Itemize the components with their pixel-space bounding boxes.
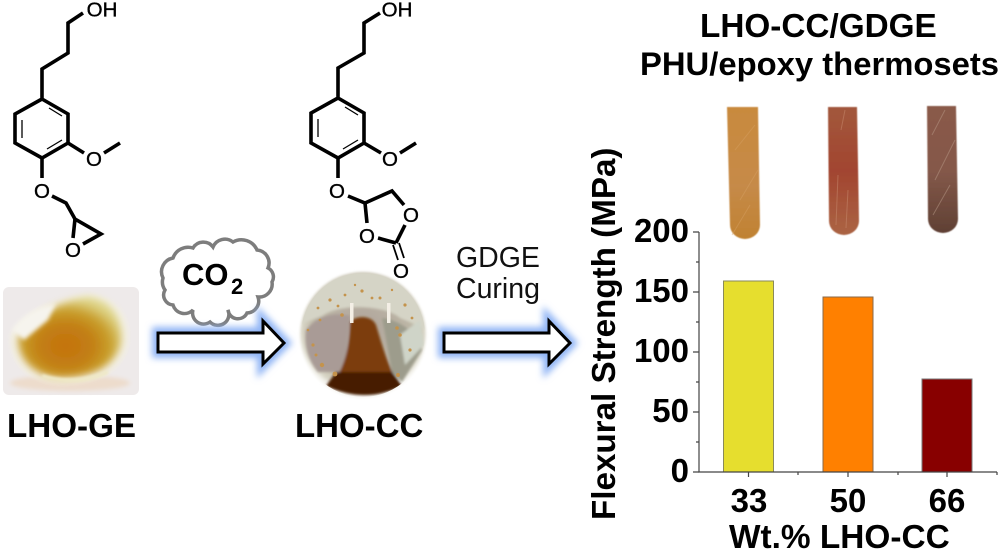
arrow: LHO-CC to thermoset: [444, 321, 570, 364]
molecule: LHO-GE structure: [15, 0, 120, 262]
molecule: LHO-CC structure: [311, 0, 419, 283]
y tick labels: 150: [634, 272, 689, 309]
photo: cured sample bar 50 wt%: [828, 107, 859, 235]
cloud: CO2: [162, 239, 273, 325]
molecule: LHO-GE structure: O: [86, 148, 102, 171]
cloud: CO2: CO: [182, 257, 228, 292]
molecule: LHO-GE structure: O: [65, 239, 81, 262]
photo: LHO-GE sample: [3, 287, 139, 395]
y axis title: Flexural Strength (MPa): [586, 148, 623, 520]
label: LHO-CC: LHO-CC: [295, 407, 423, 444]
molecule: LHO-CC structure: O: [393, 260, 409, 283]
photo: cured sample bar 66 wt%: [927, 106, 958, 233]
photo: LHO-CC sample sphere: [298, 272, 428, 398]
y tick labels: 0: [671, 452, 689, 489]
molecule: LHO-CC structure: O: [382, 148, 398, 171]
molecule: LHO-CC structure: O: [329, 180, 345, 203]
axes: [693, 232, 997, 477]
bar: 66 wt%: [922, 379, 972, 472]
title: LHO-CC/GDGE PHU/epoxy thermosets: [640, 8, 999, 82]
molecule: LHO-CC structure: O: [403, 204, 419, 227]
x tick labels: 66: [929, 482, 965, 519]
cloud: CO2: 2: [231, 274, 243, 299]
y tick labels: [634, 212, 689, 489]
y tick labels: 200: [634, 212, 689, 249]
label: GDGE Curing: [456, 242, 540, 305]
x tick labels: 50: [830, 482, 866, 519]
label: GDGE Curing: Curing: [456, 273, 540, 305]
bar: 33 wt%: [724, 281, 774, 472]
x tick labels: 33: [731, 482, 767, 519]
molecule: LHO-GE structure: O: [34, 180, 50, 203]
title: LHO-CC/GDGE PHU/epoxy thermosets: PHU/epoxy thermosets: [640, 45, 999, 82]
bar: 50 wt%: [823, 297, 873, 472]
molecule: LHO-CC structure: O: [359, 225, 375, 248]
y tick labels: 50: [652, 392, 689, 429]
y tick labels: 100: [634, 332, 689, 369]
bar chart: flexural strength: [586, 148, 997, 551]
title: LHO-CC/GDGE PHU/epoxy thermosets: LHO-CC/GDGE: [700, 8, 937, 45]
arrow: LHO-GE to LHO-CC: [158, 321, 284, 364]
label: LHO-GE: LHO-GE: [7, 408, 136, 445]
x tick labels: [731, 482, 965, 519]
photo: cured sample bar 33 wt%: [727, 107, 760, 239]
label: GDGE Curing: GDGE: [456, 242, 540, 274]
